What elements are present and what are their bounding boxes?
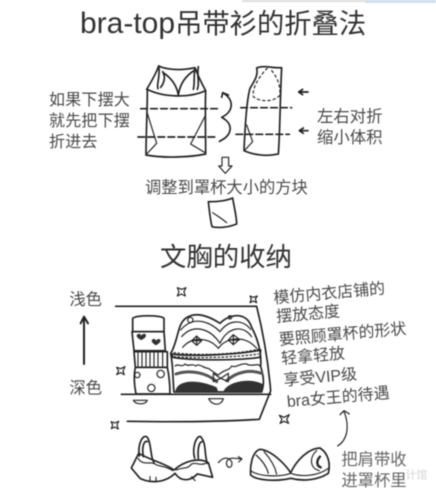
text: shop display notes: 享受VIP级 (283, 365, 358, 390)
text: adjust note: 调整到罩杯大小的方块 (145, 179, 308, 197)
browser bar remnant (242, 0, 436, 3)
drawing: folded square (208, 198, 237, 227)
drawing: bra folded (251, 448, 329, 480)
text: hem note: 如果下摆大 (49, 91, 130, 109)
arrow: dark to light (81, 317, 88, 364)
drawing: bra open (131, 436, 213, 482)
text: shop display notes: 要照顾罩杯的形状 (278, 320, 407, 349)
text: shop display notes (273, 280, 407, 411)
arrow: to folded bra (218, 457, 242, 467)
text: hem note: 就先把下摆 (49, 112, 130, 130)
panel: drawer (69, 288, 271, 482)
text: shop display notes: 摆放态度 (275, 302, 341, 326)
text: hem note: 折进去 (49, 133, 98, 151)
text: strap note (341, 451, 407, 490)
arrow: curved up (338, 411, 349, 446)
text: fold note: 缩小体积 (317, 129, 383, 147)
icon: sparkle (279, 415, 289, 423)
panel: notes right (251, 280, 427, 490)
text: fold note (317, 108, 383, 147)
drawing: stacked rolled bras (132, 316, 170, 394)
text: shop display notes: 轻拿轻放 (280, 343, 346, 368)
arrow: hollow down (219, 157, 232, 173)
text: fold note: 左右对折 (317, 108, 383, 126)
text: strap note: 把肩带收 (341, 451, 407, 469)
text: hem note (49, 91, 130, 151)
text: dark colour: 深色 (69, 379, 102, 397)
text: shop display notes: 模仿内衣店铺的 (273, 280, 386, 307)
arrow: curved fold (219, 93, 231, 141)
drawing: tank top front (146, 66, 206, 157)
panel: folding steps (138, 66, 308, 227)
text: light colour: 浅色 (69, 291, 102, 309)
icons: sparkles (111, 288, 257, 429)
drawing: drawer box (116, 306, 271, 422)
drawing: stacked bras (171, 315, 263, 392)
arrows: fold guides (299, 89, 308, 133)
heading: storage: 文胸的收纳 (160, 242, 292, 272)
watermark: 计馆 (405, 468, 427, 482)
title: bra-top吊带衫的折叠法 (80, 7, 366, 40)
text: strap note: 进罩杯里 (341, 472, 407, 490)
fold lines (138, 108, 292, 137)
text: shop display notes: bra女王的待遇 (286, 383, 390, 411)
drawing: tank top folded in half (244, 67, 282, 155)
